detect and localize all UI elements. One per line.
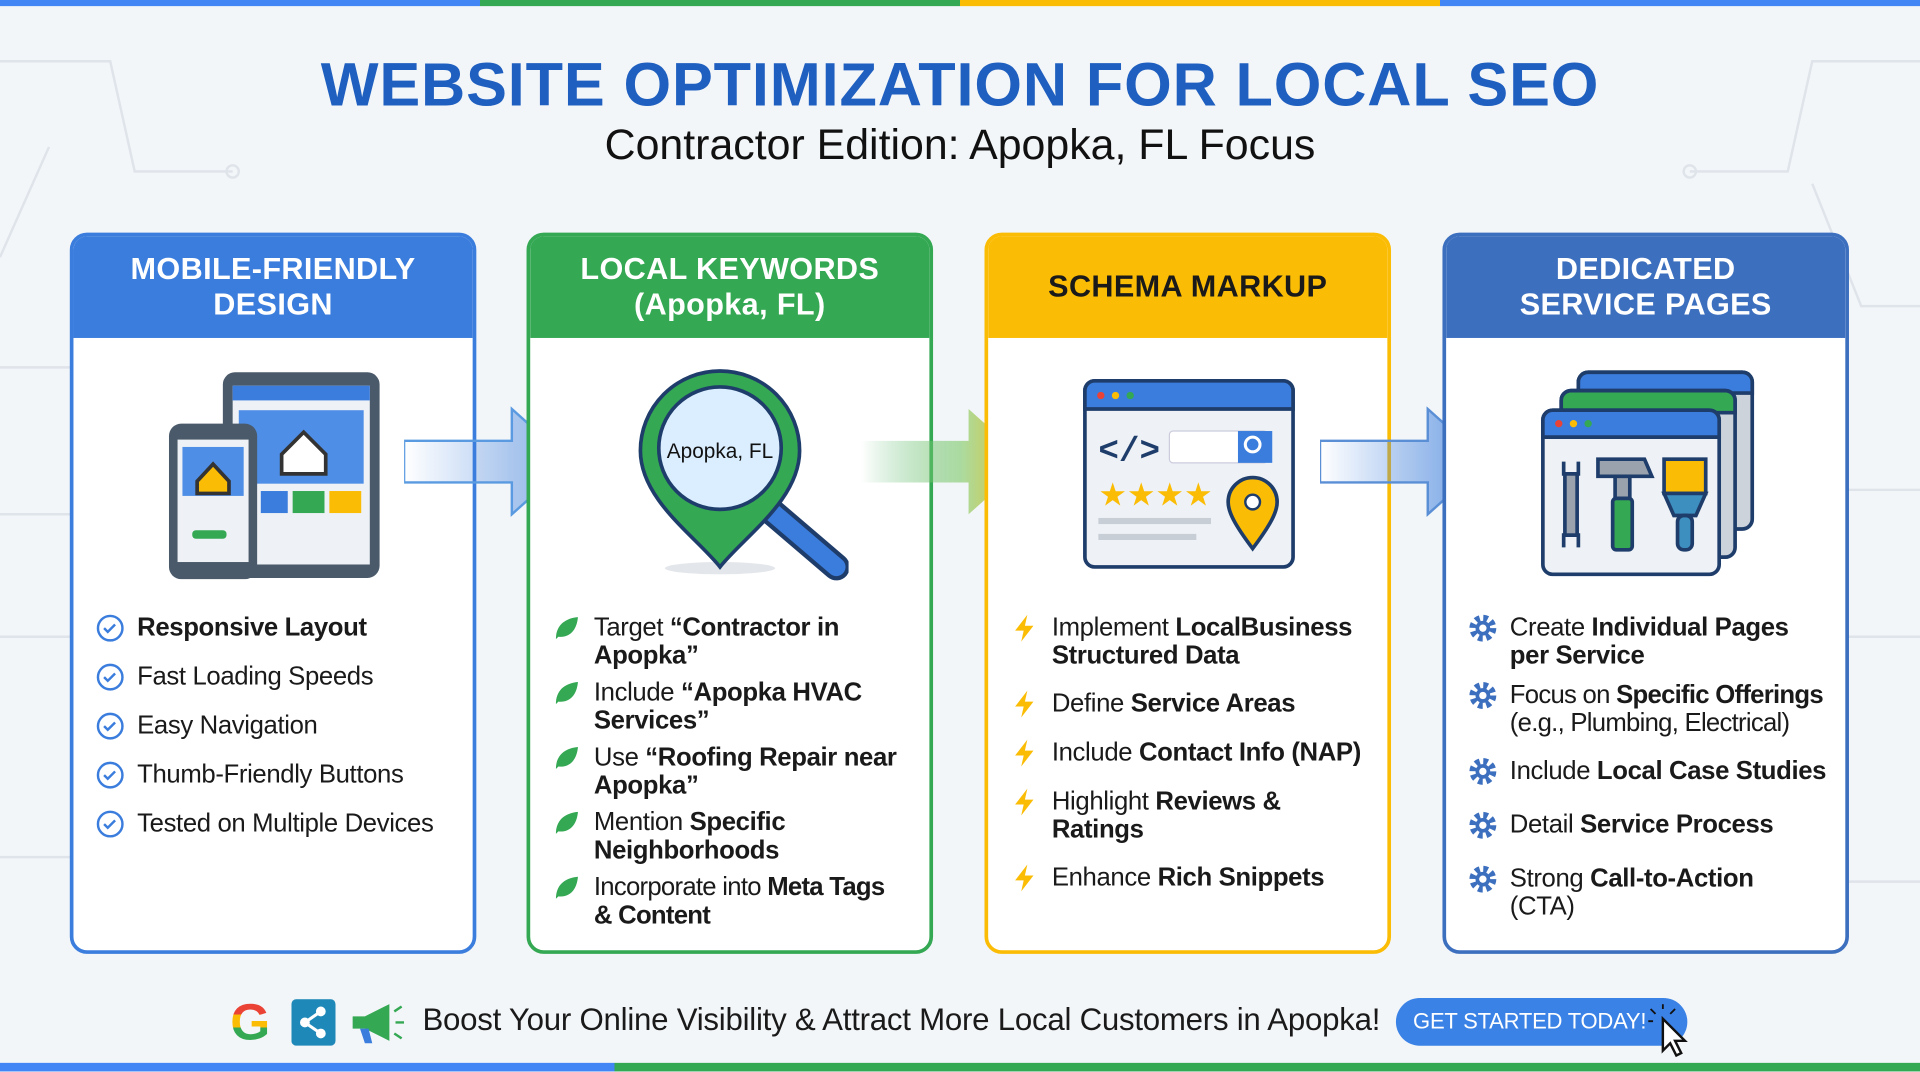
top color bar: [0, 0, 1920, 6]
list: schema: Implement LocalBusiness: [1052, 613, 1352, 642]
list: mobile: Thumb-Friendly Buttons: [137, 760, 403, 789]
heading: local keywords: (Apopka, FL): [634, 287, 826, 321]
list: keywords: Include “Apopka HVAC: [594, 678, 862, 707]
icon: location magnifier: Apopka, FL: [667, 440, 773, 463]
panel: mobile-friendly design: [70, 233, 476, 954]
heading: schema markup: [988, 236, 1387, 338]
list: service pages: Focus on Specific Offerings: [1510, 681, 1823, 709]
icon: browser with code: [1083, 379, 1295, 569]
list: mobile: Fast Loading Speeds: [137, 662, 373, 691]
list: keywords: Neighborhoods: [594, 836, 779, 864]
footer banner: [230, 993, 1688, 1058]
panel: dedicated service pages: [1442, 233, 1849, 954]
list: keywords: Apopka”: [594, 771, 698, 800]
heading: service pages: DEDICATED: [1556, 252, 1736, 286]
icon: browser with code: ★★★★: [1098, 477, 1213, 513]
icon: cursor: [1648, 1004, 1688, 1058]
list: schema: Structured Data: [1052, 642, 1239, 670]
list: mobile: Easy Navigation: [137, 711, 317, 740]
heading: local keywords: [530, 236, 929, 338]
heading: local keywords: LOCAL KEYWORDS: [580, 252, 879, 286]
heading: mobile-friendly: [73, 236, 473, 338]
list: service pages: Include Local Case Studies: [1510, 757, 1826, 785]
heading: schema markup: SCHEMA MARKUP: [1048, 269, 1327, 304]
heading: mobile-friendly: DESIGN: [213, 287, 333, 321]
list: service pages: per Service: [1510, 642, 1644, 670]
list: service pages: (CTA): [1510, 893, 1575, 921]
icon: share: [292, 999, 336, 1046]
heading: mobile-friendly: MOBILE-FRIENDLY: [131, 252, 416, 286]
list: schema: Highlight Reviews &: [1052, 787, 1281, 816]
arrow: 2 to 3: [867, 409, 984, 514]
list: schema: Enhance Rich Snippets: [1052, 863, 1324, 891]
icon: browser with code: </>: [1098, 432, 1160, 471]
title: WEBSITE OPTIMIZATION FOR LOCAL SEO: [321, 50, 1599, 119]
list: mobile: [96, 613, 433, 838]
heading: service pages: SERVICE PAGES: [1520, 287, 1772, 321]
list: mobile: Responsive Layout: [137, 613, 367, 642]
button: get started: GET STARTED TODAY!: [1413, 1009, 1646, 1033]
arrow: 3 to 4: [1320, 406, 1442, 517]
list: service pages: Detail Service Process: [1510, 811, 1773, 839]
list: service pages: Create Individual Pages: [1510, 613, 1789, 642]
bottom color bar: [0, 1063, 1920, 1071]
icon: google G: G: [230, 993, 270, 1051]
list: keywords: Mention Specific: [594, 808, 785, 836]
list: service pages: Strong Call-to-Action: [1510, 864, 1754, 893]
panel: local keywords: [527, 233, 933, 954]
list: keywords: Use “Roofing Repair near: [594, 743, 897, 771]
arrow: 1 to 2: [404, 406, 527, 517]
list: mobile: Tested on Multiple Devices: [137, 809, 433, 838]
list: keywords: Services”: [594, 707, 709, 735]
list: schema: [1015, 613, 1361, 892]
list: keywords: & Content: [594, 901, 710, 929]
list: schema: Ratings: [1052, 816, 1144, 844]
panel: schema markup: [984, 233, 1391, 954]
icon: location magnifier: [638, 369, 849, 580]
icon: stacked pages with tools: [1541, 370, 1754, 576]
list: keywords: [556, 613, 897, 929]
list: service pages: [1469, 613, 1826, 921]
list: schema: Include Contact Info (NAP): [1052, 738, 1361, 767]
list: schema: Define Service Areas: [1052, 689, 1295, 718]
footer text: Boost Your Online Visibility & Attract More Local Customers in Apopka!: [422, 1003, 1380, 1037]
button: get started: [1396, 998, 1687, 1046]
list: service pages: (e.g., Plumbing, Electrical): [1510, 709, 1789, 737]
heading: service pages: [1446, 236, 1845, 338]
icon: devices: [169, 372, 380, 580]
list: keywords: Incorporate into Meta Tags: [594, 873, 884, 901]
subtitle: Contractor Edition: Apopka, FL Focus: [605, 121, 1315, 169]
list: keywords: Target “Contractor in: [594, 613, 839, 642]
icon: megaphone: [352, 1004, 404, 1044]
list: keywords: Apopka”: [594, 642, 698, 670]
